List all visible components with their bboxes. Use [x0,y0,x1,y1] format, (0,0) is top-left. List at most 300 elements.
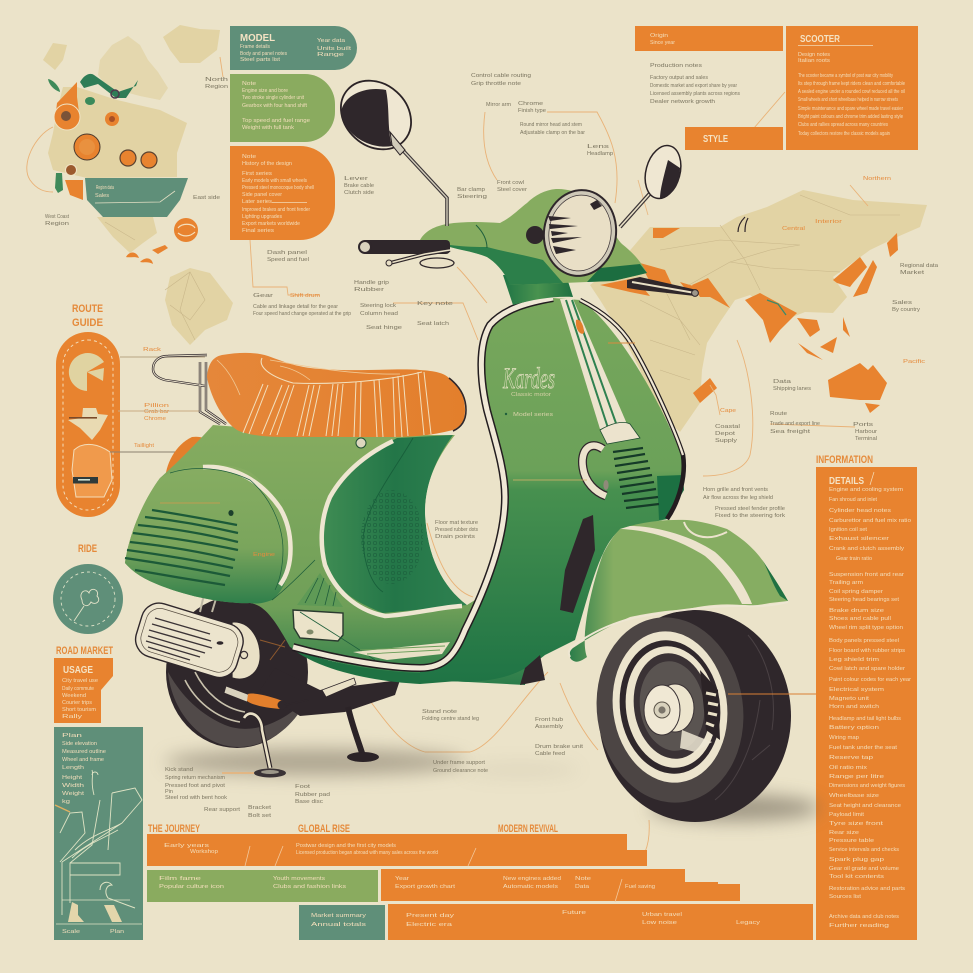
panel: timeline bar 2: Automatic models [503,884,559,890]
panel: teal summary pill [230,26,357,70]
annotations: below scooter: Cable feed [535,751,565,757]
annotations: below scooter: Assembly [535,724,564,730]
pie chart [69,353,104,391]
handlebar headset [420,189,647,285]
annotations: below scooter: Bracket [248,805,272,811]
panel: right column article: Exhaust silencer [829,536,890,542]
annotations: right map [703,176,938,519]
heading: right column: INFORMATION [816,454,873,466]
panel: right column article: Payload limit [829,812,865,818]
panel: teal technical sketch: Measured outline [62,749,106,755]
annotations: around handlebars: Gear [253,293,274,299]
panel: right column article [816,467,917,940]
annotations: around handlebars: Mirror arm [486,102,511,108]
panel: green specification: Note [242,81,256,87]
annotations: around handlebars: Region [205,84,228,90]
annotations: left of seat: Grab bar [144,409,169,415]
annotations: right map: Supply [715,438,738,444]
panel: timeline green bar: Film fame [159,876,201,882]
panel: timeline bar 1: Early years [164,843,210,849]
map markers: ringed circles [54,104,157,176]
annotation: floor mat note: Floor mat texture [435,520,478,526]
panel: timeline bar 2: Year [395,876,409,882]
right mirror [620,142,686,227]
panel: right column article: Paint colour codes for each year [829,677,911,683]
front wheel [585,608,816,822]
annotations: around handlebars: Speed and fuel [267,257,309,263]
panel: left orange note: Weekend [62,693,86,699]
annotations: right map: Sea freight [770,429,811,435]
panel: left orange note: City travel use [62,678,98,684]
annotations: around handlebars: North [205,77,228,83]
annotations: around handlebars: Cable and linkage detail for the gear [253,304,338,310]
annotations: below scooter: Under frame support [433,760,486,766]
panel: timeline bar 2: Export growth chart [395,884,456,890]
frame black gap [560,515,595,613]
annotations: around handlebars: Headlamp [587,151,613,157]
panel: right column article: Gear oil grade and volume [829,866,899,872]
panel: timeline bar 3 [388,904,813,940]
panel: timeline teal box: Market summary [311,913,367,919]
panel: orange history: History of the design [242,161,292,167]
panel: orange history: Final series [242,228,275,234]
step-through inner panel [322,435,467,613]
panel: top right article: The scooter became a symbol of post war city mobility [798,73,893,79]
panel: right column article: Fuel tank under the seat [829,745,898,751]
rear rack [153,355,226,424]
panel: right column article: Shoes and cable pull [829,616,891,622]
panel: timeline bar 1 [147,834,647,866]
panel: timeline bar 1: Licensed production began abroad with many sales across the world [296,850,438,856]
panel: timeline bar 3: Legacy [736,920,761,926]
panel: left orange note: Rally [62,714,83,720]
annotations: around handlebars: West Coast [45,214,70,220]
panel: left orange note [54,658,113,723]
annotations: below scooter: Front hub [535,717,563,723]
shield lettering [502,343,635,480]
floor note leader [427,523,473,597]
panel: orange history [230,146,335,240]
panel: top right article [786,26,918,150]
leader lines [27,57,868,852]
heading: timeline labels: THE JOURNEY [148,823,200,835]
fork shadow [520,655,545,685]
annotations: around handlebars: Control cable routing [471,73,531,79]
annotations: right map: Central [782,226,805,232]
panel: right column article: Magneto unit [829,696,870,702]
annotations: around handlebars: Region [45,221,69,227]
front fender [569,520,788,662]
panel: right column article: Dimensions and weight figures [829,783,906,789]
panel: orange infographic pill [56,332,120,517]
panel: right column article: Horn and switch [829,704,879,710]
panel: top right article: A sealed engine under a rounded cowl reduced all the oil [798,89,905,95]
annotations: right map: Route [770,411,787,417]
annotations: right map: Horn grille and front vents [703,487,769,493]
panel: timeline bar 2: Fuel saving [625,884,655,890]
annotations: right map: Terminal [855,436,877,442]
panel: timeline bar 3: Urban travel [642,912,682,918]
heading: small orange box: ROAD MARKET [56,645,113,657]
annotations: below scooter: Pressed foot and pivot [165,783,226,789]
annotations: around handlebars: Column head [360,311,398,317]
floor mat dots [361,490,423,584]
panel: timeline bar 3: Present day [406,913,455,919]
annotations: below scooter: Folding centre stand leg [422,716,479,722]
panel: right column article: Tyre size front [829,821,884,827]
panel: timeline green bar: Popular culture icon [159,884,224,890]
annotation: top right notes [650,63,740,105]
annotations: around handlebars: Steering lock [360,303,397,309]
rear wheel [166,590,308,748]
annotations: right map: Harbour [855,429,877,435]
lower floor dark band [290,647,470,684]
panel: orange history: Pressed steel monocoque body shell [242,185,314,191]
annotations: around handlebars: Clutch side [344,190,374,196]
horn ring [582,446,609,496]
panel: top right article: Bright paint colours and chrome trim added lasting style [798,114,903,120]
map fragments [68,408,108,440]
annotations: right map: By country [892,307,921,313]
panel: orange history: Later series [242,199,273,205]
panel: small orange label: STYLE [703,134,728,145]
world map: Americas [43,25,233,345]
annotation: top right notes: Dealer network growth [650,99,715,105]
panel: right column article: Reserve tap [829,755,873,761]
panel: teal summary pill: Steel parts list [240,57,281,63]
heading: timeline labels [148,823,558,835]
panel: timeline bar 3: Low noise [642,920,677,926]
panel: right column article: Trailing arm [829,580,863,586]
panel: teal summary pill: MODEL [240,33,275,44]
panel: timeline bar 2: Note [575,876,591,882]
panel: orange history: Export markets worldwide [242,221,300,227]
panel: right column article: Brake drum size [829,608,884,614]
panel: left orange note: Daily commute [62,686,94,692]
headlight [526,184,623,282]
annotations: right map: Cape [720,408,736,414]
annotations: right map: Shipping lanes [773,386,812,392]
annotations: around handlebars: Bar clamp [457,187,485,193]
annotations: right map: Air flow across the leg shield [703,495,773,501]
annotations: right map: Depot [715,431,736,437]
white frame trim [322,441,462,616]
annotations: around handlebars: Adjustable clamp on the bar [520,130,585,136]
annotation: top right notes: Licensed assembly plants across regions [650,91,740,97]
panel: right column article: Archive data and club notes [829,914,900,920]
annotation: top right notes: Factory output and sales [650,75,709,81]
leader lines from pill to rack [110,357,205,452]
annotations: around handlebars: Chrome [518,101,543,107]
front shield [420,298,684,682]
panel: right column article: Spark plug gap [829,857,884,863]
annotation: floor mat note: Pressed rubber dots [435,527,478,533]
annotations: below scooter: Ground clearance note [433,768,488,774]
annotations: below scooter: Rear support [204,807,241,813]
panel: right column article: Cowl latch and spare holder [829,666,905,672]
shield grille [613,448,659,508]
annotations: right map: Market [900,270,925,276]
panel: teal technical sketch: Width [62,783,84,789]
annotations: left of seat [134,347,169,449]
engine cowl [125,465,292,604]
annotations: around handlebars: Grip throttle note [471,81,521,87]
panel: right column article: Crank and clutch assembly [829,546,905,552]
shield dark corner [657,475,684,520]
panel: teal technical sketch: Length [62,765,84,771]
annotations: right map: Pressed steel fender profile [715,506,785,512]
panel: right column article: Tool kit contents [829,874,885,880]
annotations: around handlebars: Seat hinge [366,325,402,331]
annotation: floor mat note [435,520,478,540]
annotations: below scooter: Pin [165,789,173,795]
panel: right column article: Ignition coil set [829,527,868,533]
panel: teal technical sketch: Plan [62,733,82,739]
panel: right column article: Suspension front and rear [829,572,904,578]
panel: right column article: Leg shield trim [829,657,879,663]
annotations: around handlebars: Round mirror head and stem [520,122,582,128]
panel: orange history: Early models with small wheels [242,178,307,184]
annotations: left of seat: Pillion [144,403,169,409]
annotations: left of seat: Chrome [144,416,166,422]
annotations: around handlebars: Rubber [354,287,385,293]
step-through opening [425,410,505,605]
panel: timeline bar 2: New engines added [503,876,561,882]
panel: right column article: DETAILS [829,476,864,487]
panel: top right article: Its step through frame kept riders clean and comfortable [798,81,905,87]
annotations: right map: Northern [863,176,891,182]
panel: right column article: Sources list [829,894,862,900]
scooter illustration [125,67,816,822]
annotations: around handlebars: Seat latch [417,321,449,327]
annotations: around handlebars: Lever [344,176,369,182]
teal banner on map: Region data [96,185,114,191]
panel: teal technical sketch: Side elevation [62,741,97,747]
heading: timeline labels: MODERN REVIVAL [498,823,558,835]
panel: right column article: Coil spring damper [829,589,883,595]
panel: top right article: Italian roots [798,58,831,64]
panel: orange history: Note [242,154,256,160]
panel: teal summary pill: Frame details [240,44,270,50]
panel: timeline green bar [147,870,378,902]
panel: right column article: Fan shroud and inlet [829,497,878,503]
panel: green specification: Top speed and fuel range [242,118,310,124]
annotation: floor mat note: Drain points [435,534,476,540]
cowl vents [125,510,238,585]
sketch lines [60,770,142,915]
panel: right column article: Range per litre [829,774,884,780]
annotations: around handlebars: Handle grip [354,280,389,286]
heading: left pill: ROUTE [72,303,103,315]
annotations: left of seat: Taillight [134,443,155,449]
panel: top orange banner [635,26,783,51]
panel: top right article: Simple maintenance and spare wheel made travel easier [798,106,903,112]
panel: right column article: Floor board with rubber strips [829,648,906,654]
panel: teal technical sketch: kg [62,799,70,805]
panel: orange history: Improved brakes and front fender [242,207,310,213]
panel: teal summary pill: Units built [317,46,352,52]
annotations: below scooter: Base disc [295,799,324,805]
seat [207,353,466,448]
map marker: orange arc [55,82,80,130]
map badge [174,218,198,242]
annotations: around handlebars: Dash panel [267,250,307,256]
panel: orange history: Side panel cover [242,192,282,198]
annotations: around handlebars: Key note [417,301,453,307]
annotations: around handlebars: Steering [457,194,487,200]
shield lettering: Model series [513,412,554,418]
panel: timeline bar 2: Data [575,884,589,890]
panel: right column article: Gear train ratio [836,556,872,562]
engine cowl: Engine [253,552,275,558]
annotations: left of seat: Rack [143,347,162,353]
panel: right column article: Rear size [829,830,859,836]
panel: right column article: Restoration advice and parts [829,886,906,892]
shield centre stripes [560,299,640,444]
annotations: around handlebars [45,73,613,331]
annotations: right map: Coastal [715,424,740,430]
panel: right column article: Pressure table [829,838,874,844]
stand leader highlight [222,772,254,774]
panel: right column article: Engine and cooling system [829,487,903,493]
annotations: around handlebars: Brake cable [344,183,374,189]
panel: right column article: Body panels pressed steel [829,638,899,644]
panel: top right article: Design notes [798,52,831,58]
annotation: top right notes: Domestic market and export share by year [650,83,737,89]
scooter body [125,425,530,685]
panel: timeline teal box: Annual totals [311,922,367,928]
panel: green specification: Weight with full tank [242,125,295,131]
panel: right column article: Further reading [829,923,889,929]
panel: top right article: Today collectors restore the classic models again [798,131,890,137]
panel: teal technical sketch: Height [62,775,83,781]
panel: right column article: Wiring map [829,735,859,741]
heading: timeline labels: GLOBAL RISE [298,823,350,835]
neck [503,275,573,305]
caribbean patches [126,245,168,264]
heading: dial: RIDE [78,543,97,555]
panel: top orange banner: Since year [650,40,675,46]
annotations: below scooter: Rubber pad [295,792,330,798]
annotations: right map: Fixed to the steering fork [715,513,786,519]
panel: teal summary pill: Range [317,52,344,58]
panel: right column article: Headlamp and tail light bulbs [829,716,902,722]
panel: top right article: Small wheels and short wheelbase helped in narrow streets [798,97,898,103]
panel: right column article: Service intervals and checks [829,847,900,853]
annotations: below scooter: Drum brake unit [535,744,584,750]
annotations: right map: Sales [892,300,913,306]
annotations: around handlebars: Steel cover [497,187,527,193]
annotations: right map: Pacific [903,359,926,365]
annotations: right map: Interior [815,219,843,225]
panel: top right article: SCOOTER [800,34,841,45]
panel: left orange note: Courier trips [62,700,93,706]
floor stripes [353,642,450,660]
world map: Eurasia, Africa, Australia [590,190,927,432]
panel: green specification: Engine size and bore [242,88,288,94]
panel: green specification: Two stroke single cylinder unit [242,95,305,101]
teal banner on map: Sales [95,193,110,199]
panel: green specification [230,74,335,142]
taillight [165,437,210,482]
panel: timeline bar 1: Postwar design and the first city models [296,843,397,849]
icon: teal dial with flower [53,564,123,634]
panel: right column article: Battery option [829,725,879,731]
panel: right column article: Oil ratio mix [829,765,868,771]
teal banner on map [85,178,188,217]
annotation: top right notes: Production notes [650,63,703,69]
panel: right column article: Wheel rim split type option [829,625,903,631]
panel: timeline bar 3: Electric era [406,922,452,928]
heading: left pill [72,303,103,329]
left mirror [327,67,447,226]
annotations: right map: Regional data [900,263,938,269]
annotations: below scooter: Stand note [422,709,457,715]
panel: teal summary pill: Body and panel notes [240,51,287,57]
annotations: below scooter [165,709,584,819]
annotations: below scooter: Spring return mechanism [165,775,225,781]
panel: timeline bar 2 [381,869,740,902]
panel: right column article: Carburettor and fuel mix ratio [829,518,911,524]
panel: timeline bar 1: Workshop [190,849,218,855]
muffler [131,599,285,682]
panel: orange history: Lighting upgrades [242,214,282,220]
annotations: below scooter: Foot [295,784,311,790]
annotations: below scooter: Kick stand [165,767,193,773]
annotations: around handlebars: Finish type [518,108,546,114]
heading: left pill: GUIDE [72,317,103,329]
annotations: around handlebars: Front cowl [497,180,524,186]
map marker: green swoosh [80,74,138,98]
centre frame and stand [244,668,400,778]
panel: orange history: First series [242,171,273,177]
left grip and lever [359,240,454,268]
hatch panel [272,560,375,660]
panel: teal technical sketch: Scale [62,929,80,935]
annotations: right map: Trade and export line [770,421,820,427]
panel: right column article: Steering head bearings set [829,597,900,603]
panel: teal summary pill: Year data [317,38,345,44]
panel: teal technical sketch [54,727,143,940]
annotations: below scooter: Steel rod with bent hook [165,795,228,801]
panel: timeline green bar: Clubs and fashion links [273,884,347,890]
panel: left orange note: USAGE [63,665,93,676]
main chrome trim [293,298,684,668]
annotations: right map: Data [773,379,791,385]
ground shadows [165,749,820,821]
annotations: below scooter: Bolt set [248,813,272,819]
kick lever with orange grip [224,686,308,710]
panel: top orange banner: Origin [650,33,668,39]
panel: teal technical sketch: Plan [110,929,124,935]
right grip [627,277,698,296]
panel: top right article: Clubs and rallies spread across many countries [798,122,888,128]
annotations: around handlebars: Lens [587,144,610,150]
panel: right column article: Electrical system [829,687,884,693]
panel: timeline green bar: Youth movements [273,876,326,882]
panel: right column article: Wheelbase size [829,793,879,799]
panel: right column article: Cylinder head notes [829,508,892,514]
asia country patches [600,228,898,413]
annotations: right map: Ports [853,422,874,428]
panel: small orange label [685,127,783,150]
annotations: around handlebars: Shift drum [290,293,320,299]
panel: green specification: Gearbox with four hand shift [242,103,308,109]
shield lettering: Kardes [502,362,555,395]
panel: teal technical sketch: Wheel and frame [62,757,104,763]
panel: right column article: Seat height and clearance [829,803,901,809]
panel: timeline teal box [299,905,385,940]
